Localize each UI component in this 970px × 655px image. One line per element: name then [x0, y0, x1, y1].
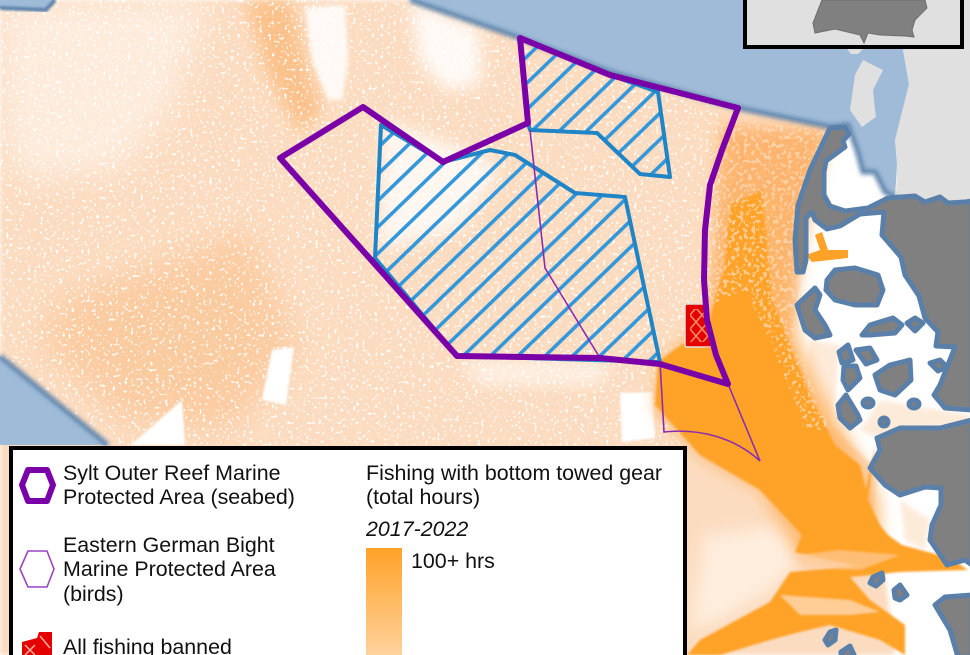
- islands: light grey: [847, 49, 883, 127]
- heatmap: intense fishing band: [645, 110, 968, 655]
- Eastern German Bight Marine Protected Area outline: [530, 130, 760, 461]
- Sylt Outer Reef Marine Protected Area outline: [280, 38, 738, 384]
- colour ramp label: 100+ hrs: [411, 549, 495, 573]
- coastline: mainland and islands: [795, 127, 970, 655]
- sea: north: [0, 0, 909, 197]
- legend label: Eastern German Bight: Marine Protected Area: [63, 557, 276, 581]
- legend panel: [11, 448, 685, 655]
- legend label: Eastern German Bight: Eastern German Bight: [63, 533, 275, 557]
- inset locator map: [745, 0, 962, 47]
- legend heading: fishing hours: Fishing with bottom towed gear: [366, 461, 662, 485]
- legend heading: fishing hours: (total hours): [366, 485, 480, 509]
- legend icon: all fishing banned: [22, 632, 52, 655]
- colour ramp: [366, 548, 402, 655]
- land: light grey: [895, 0, 970, 205]
- protected area hatching: fishing gear restricted zones: [375, 38, 670, 362]
- legend label: Eastern German Bight: (birds): [63, 582, 124, 606]
- legend period: 2017-2022: [365, 517, 468, 541]
- legend icon: Sylt Outer Reef: [22, 470, 53, 501]
- sea: south-west: [0, 356, 108, 445]
- legend label: Sylt Outer Reef: Protected Area (seabed): [63, 485, 295, 509]
- legend label: Sylt Outer Reef: Sylt Outer Reef Marine: [63, 461, 281, 485]
- all fishing banned zone: [685, 304, 712, 347]
- legend icon: Eastern German Bight: [20, 551, 54, 587]
